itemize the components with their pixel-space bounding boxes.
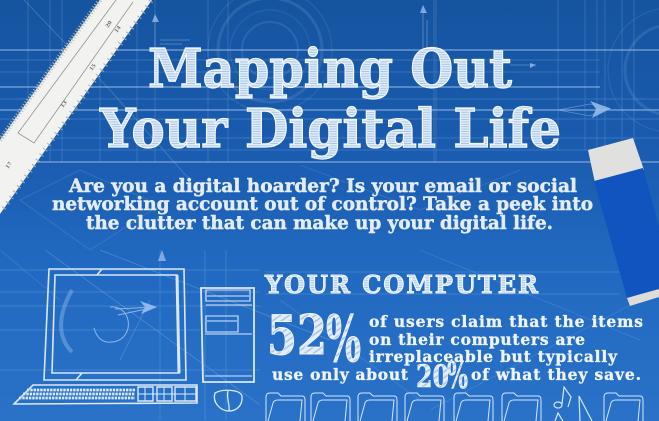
statistic text: use only about	[272, 365, 409, 384]
statistic: 20%: %	[447, 355, 468, 397]
monitor screen sketch	[61, 290, 156, 352]
ruler numbers: 13	[60, 100, 69, 109]
panel: lower section faint sketch	[0, 165, 640, 410]
folder icons	[266, 393, 643, 421]
ruler numbers	[5, 20, 123, 170]
icon: folder	[454, 393, 493, 421]
icon: folder	[311, 393, 350, 421]
icon: music notes	[554, 387, 592, 421]
icon: keyboard	[14, 385, 197, 404]
decorative target circles	[208, 0, 659, 132]
decorative arrows	[152, 5, 611, 261]
icon: computer tower	[201, 288, 254, 382]
statistic: 52%	[267, 302, 361, 377]
ruler tick marks	[0, 0, 100, 140]
eraser	[588, 138, 659, 306]
intro text: Are you a digital hoarder? Is your email or social	[68, 176, 577, 197]
icon: folder	[502, 393, 541, 421]
icon: mouse	[214, 390, 242, 411]
icon: folder	[358, 393, 397, 421]
icon: folder	[604, 393, 643, 421]
title: Mapping Out	[148, 38, 512, 100]
statistic text: of users claim that the items	[369, 312, 643, 331]
statistic: 52%: 52	[267, 303, 327, 367]
statistic: 52%: %	[326, 302, 361, 377]
ruler numbers: 20	[105, 20, 114, 29]
icon: computer monitor	[44, 269, 186, 380]
intro text	[52, 176, 593, 234]
icon: folder	[266, 393, 305, 421]
intro text: the clutter that can make up your digital life.	[86, 213, 553, 234]
ruler	[0, 0, 152, 214]
ruler numbers: 17	[5, 161, 14, 170]
ruler numbers: 15	[89, 63, 98, 72]
statistic text: irreplaceable but typically	[369, 347, 618, 366]
statistic text: of what they save.	[471, 365, 641, 384]
statistic text: on their computers are	[369, 330, 585, 349]
ruler numbers: 14	[114, 25, 123, 34]
ruler inner guide	[18, 0, 133, 143]
icon: folder	[405, 393, 444, 421]
statistic: 20%: 20	[416, 359, 449, 395]
intro text: networking account out of control? Take a peek into	[52, 194, 593, 215]
title: Your Digital Life	[99, 98, 561, 160]
statistic text	[272, 312, 643, 384]
section heading: YOUR COMPUTER	[264, 270, 539, 299]
title	[99, 38, 561, 160]
